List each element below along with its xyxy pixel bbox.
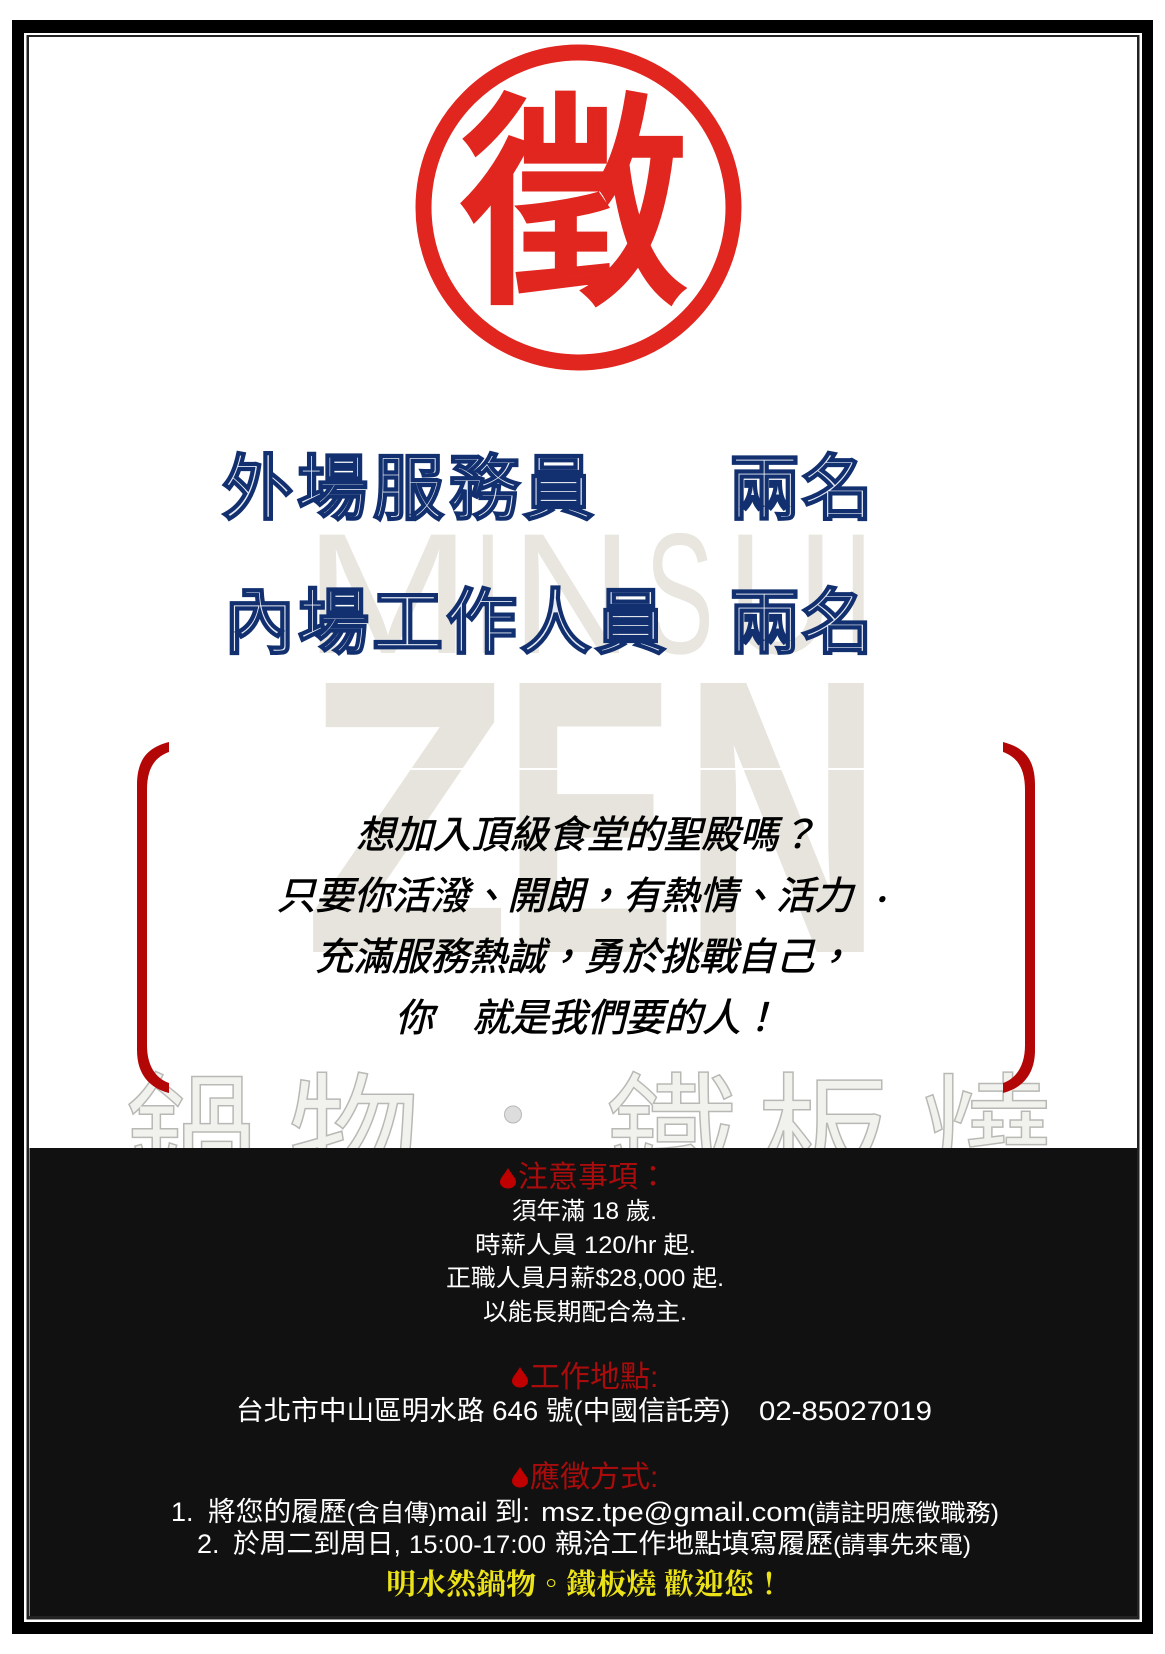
watermark: restaurant name: 鐵板燒 <box>605 1031 1053 1222</box>
watermark: ZEN logo: Z <box>303 598 511 1035</box>
application method 2: (請事先來電) <box>833 1532 971 1559</box>
watermark: restaurant name: 鍋物 <box>125 1031 420 1222</box>
heading: how to apply: 應徵方式: <box>530 1461 658 1494</box>
watermark: MINSUI logo: I <box>842 499 874 690</box>
watermark: MINSUI logo: I <box>473 498 503 690</box>
closing welcome line: 明水然鍋物。鐵板燒 歡迎您！ <box>386 1562 784 1603</box>
application method 1: mail 到: <box>437 1497 530 1527</box>
heading: kitchen staff: 內場工作人員 <box>224 566 666 668</box>
slogan text block: 想加入頂級食堂的聖殿嗎？ <box>356 804 817 860</box>
work address and phone <box>236 1396 932 1426</box>
watermark: restaurant name: · <box>473 1053 553 1169</box>
heading: notes: 注意事項： <box>518 1152 668 1196</box>
notes list <box>446 1198 724 1326</box>
watermark: ZEN logo <box>303 598 882 1035</box>
notes list: 時薪人員 120/hr 起. <box>475 1232 696 1259</box>
heading: kitchen staff: 兩名 <box>729 566 873 668</box>
right red bracket <box>1003 742 1035 1093</box>
application method 1: (請註明應徵職務) <box>807 1500 999 1527</box>
watermark: MINSUI logo: M <box>303 498 472 690</box>
panel: job details <box>30 1148 1137 1616</box>
heading: kitchen staff <box>224 566 873 668</box>
work address and phone: 02-85027019 <box>759 1396 932 1426</box>
watermark: MINSUI logo: U <box>727 498 834 689</box>
icon: red recruitment stamp: 徵 <box>461 23 687 350</box>
slogan text block: 充滿服務熱誠，勇於挑戰自己， <box>315 926 852 982</box>
notes list: 以能長期配合為主. <box>483 1299 687 1326</box>
application method 1 <box>171 1497 999 1527</box>
slogan text block <box>277 804 893 1043</box>
notes list: 正職人員月薪$28,000 起. <box>446 1265 724 1292</box>
application method 1: 1. <box>171 1497 194 1527</box>
application method 2: 15:00-17:00 <box>409 1531 546 1559</box>
application method 2: 於周二到周日, <box>233 1529 401 1559</box>
heading: front-of-house staff: 兩名 <box>729 432 873 534</box>
heading: front-of-house staff: 外場服務員 <box>222 432 594 534</box>
notes list: 須年滿 18 歲. <box>512 1198 657 1225</box>
application method 1: msz.tpe@gmail.com <box>541 1497 807 1527</box>
left red bracket <box>137 742 169 1093</box>
slogan text block: 你 就是我們要的人！ <box>395 987 779 1043</box>
application method 1: 將您的履歷(含自傳) <box>208 1497 437 1527</box>
watermark: ZEN logo: E <box>502 598 677 1035</box>
watermark: MINSUI logo: S <box>645 499 714 691</box>
slogan text block: 只要你活潑、開朗，有熱情、活力 · <box>277 865 893 921</box>
work address and phone: 台北市中山區明水路 646 號(中國信託旁) <box>236 1396 730 1426</box>
watermark: MINSUI logo: N <box>511 498 633 690</box>
application method 2 <box>197 1529 971 1559</box>
application method 2: 2. <box>197 1529 220 1559</box>
watermark: ZEN logo: N <box>682 598 882 1035</box>
application method 2: 親洽工作地點填寫履歷 <box>555 1529 833 1559</box>
heading: work location: 工作地點: <box>530 1361 658 1394</box>
watermark: MINSUI logo <box>303 498 874 691</box>
watermark: restaurant name <box>125 1031 1053 1222</box>
heading: front-of-house staff <box>222 432 873 534</box>
